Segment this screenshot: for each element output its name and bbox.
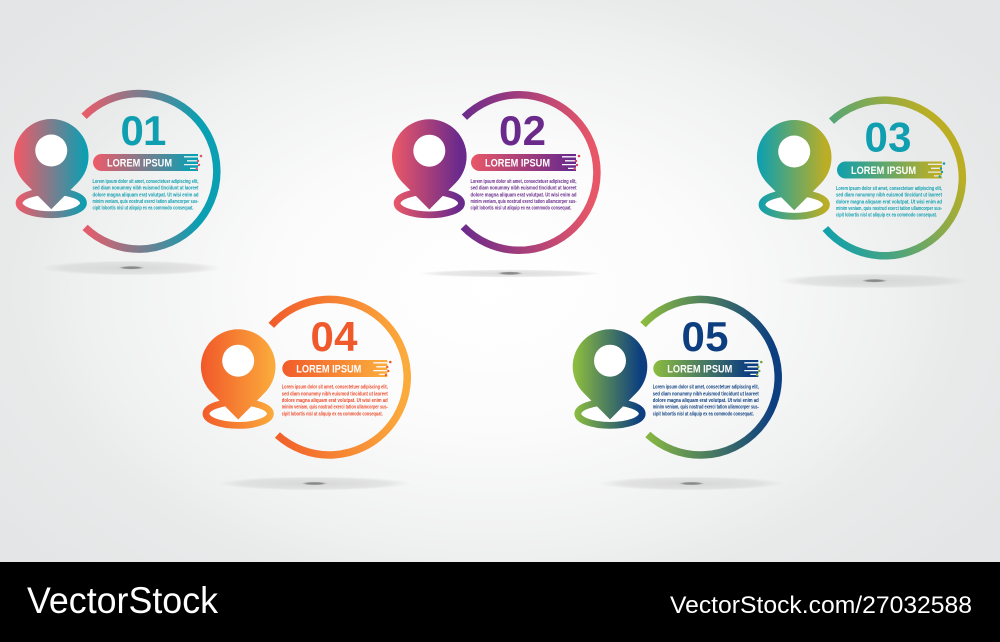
- ground shadow 01: [40, 260, 222, 276]
- label bar 02: [471, 154, 580, 171]
- icon: map pin 02: [392, 119, 467, 215]
- body text 04: [282, 385, 388, 417]
- body text 01: [92, 179, 199, 212]
- footer image id: VectorStock.com/27032588: [670, 592, 972, 619]
- ring 05: [643, 299, 778, 455]
- label bar 05: LOREM IPSUM: [667, 364, 732, 376]
- icon: map pin 05: [573, 329, 647, 425]
- body text 02: [470, 179, 577, 212]
- body text 05: Lorem ipsum dolor sit amet, consectetuer adipiscing elit,: [653, 385, 759, 391]
- label bar 04: LOREM IPSUM: [296, 364, 361, 376]
- body text 05: [653, 385, 759, 417]
- body text 04: Lorem ipsum dolor sit amet, consectetuer adipiscing elit,: [282, 385, 388, 391]
- panel: step 01: [14, 94, 222, 276]
- body text 01: cipit lobortis nisl ut aliquip ex ea commodo consequat.: [92, 206, 194, 212]
- body text 03: sed diam nonummy nibh euismod tincidunt ut laoreet: [836, 193, 942, 199]
- footer logo: VectorStock: [27, 580, 218, 621]
- panel: step 05: [573, 299, 784, 490]
- label bar 05: [653, 360, 763, 377]
- body text 05: sed diam nonummy nibh euismod tincidunt ut laoreet: [653, 391, 759, 397]
- icon: map pin 01: [14, 119, 89, 215]
- ring 03: [825, 100, 962, 256]
- ring 04: [271, 299, 407, 455]
- label bar 02: LOREM IPSUM: [485, 158, 550, 170]
- body text 01: Lorem ipsum dolor sit amet, consectetuer adipiscing elit,: [92, 179, 199, 185]
- icon: map pin 03: [757, 120, 832, 216]
- label bar 03: [837, 162, 945, 178]
- footer bar: [0, 562, 1000, 642]
- label bar 01: LOREM IPSUM: [107, 158, 172, 170]
- body text 02: sed diam nonummy nibh euismod tincidunt ut laoreet: [470, 186, 577, 192]
- body text 03: [836, 186, 942, 219]
- ring 02: [463, 95, 597, 250]
- body text 01: dolore magna aliquam erat volutpat. Ut wisi enim ad: [92, 192, 198, 198]
- label bar 04: [282, 360, 392, 377]
- number 03: 03: [864, 114, 912, 161]
- number 01: 01: [120, 107, 166, 154]
- panel: step 02: [392, 95, 602, 277]
- body text 03: cipit lobortis nisl ut aliquip ex ea commodo consequat.: [836, 213, 937, 219]
- ring 01: [84, 94, 217, 249]
- body text 04: cipit lobortis nisl ut aliquip ex ea commodo consequat.: [282, 411, 383, 417]
- body text 03: Lorem ipsum dolor sit amet, consectetuer adipiscing elit,: [836, 186, 942, 192]
- body text 03: dolore magna aliquam erat volutpat. Ut wisi enim ad: [836, 199, 942, 205]
- body text 05: minim veniam, quis nostrud exerci tation ullamcorper sus-: [653, 405, 759, 411]
- panel: step 04: [201, 299, 411, 490]
- number 02: 02: [499, 107, 546, 154]
- body text 01: minim veniam, quis nostrud exerci tation ullamcorper sus-: [92, 199, 199, 205]
- body text 02: minim veniam, quis nostrud exerci tation ullamcorper sus-: [470, 199, 577, 205]
- body text 04: minim veniam, quis nostrud exerci tation ullamcorper sus-: [282, 405, 388, 411]
- body text 02: cipit lobortis nisl ut aliquip ex ea commodo consequat.: [470, 206, 572, 212]
- icon: map pin 04: [201, 329, 276, 425]
- ground shadow 04: [217, 476, 411, 490]
- body text 04: dolore magna aliquam erat volutpat. Ut wisi enim ad: [282, 398, 388, 404]
- body text 05: cipit lobortis nisl ut aliquip ex ea commodo consequat.: [653, 411, 754, 417]
- label bar 01: [93, 154, 202, 171]
- body text 04: sed diam nonummy nibh euismod tincidunt ut laoreet: [282, 391, 388, 397]
- label bar 03: LOREM IPSUM: [851, 165, 916, 177]
- ground shadow 02: [418, 270, 602, 278]
- ground shadow 05: [598, 476, 784, 490]
- body text 03: minim veniam, quis nostrud exerci tation ullamcorper sus-: [836, 206, 942, 212]
- body text 05: dolore magna aliquam erat volutpat. Ut wisi enim ad: [653, 398, 759, 404]
- panel: step 03: [757, 100, 970, 288]
- number 04: 04: [310, 313, 358, 360]
- ground shadow 03: [778, 274, 970, 288]
- body text 02: Lorem ipsum dolor sit amet, consectetuer adipiscing elit,: [470, 179, 577, 185]
- body text 01: sed diam nonummy nibh euismod tincidunt ut laoreet: [92, 186, 199, 192]
- number 05: 05: [682, 313, 728, 360]
- body text 02: dolore magna aliquam erat volutpat. Ut wisi enim ad: [470, 192, 576, 198]
